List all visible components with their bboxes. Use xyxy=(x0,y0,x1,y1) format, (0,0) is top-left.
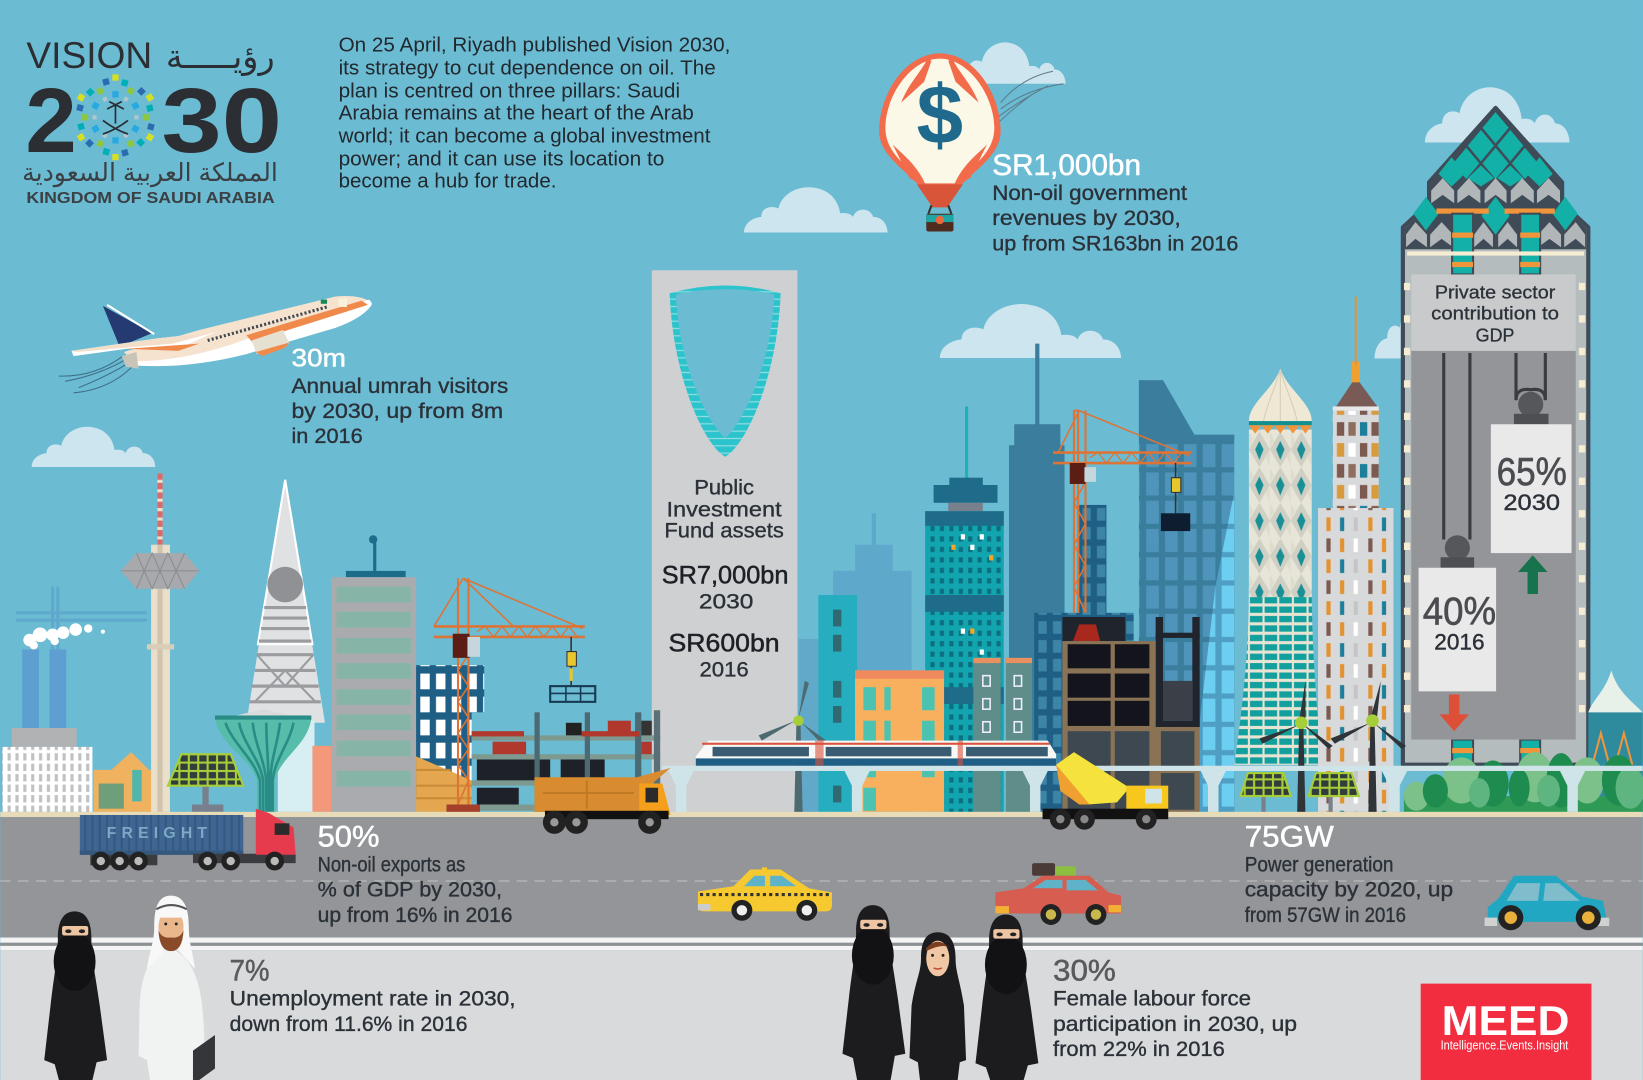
lift pulley right xyxy=(1516,389,1545,400)
woman 1 xyxy=(842,905,905,1080)
blue windows building xyxy=(416,665,484,796)
lower panel xyxy=(0,950,1643,1080)
stat: 7% unemployment xyxy=(230,954,516,1036)
stat: 30% female labour force: participation in 2030, up xyxy=(1053,1012,1297,1036)
truck chassis xyxy=(90,855,157,865)
public investment fund tower: Fund assets xyxy=(664,518,784,542)
stat: 30m umrah visitors: in 2016 xyxy=(291,424,363,448)
private sector GDP text: 40% xyxy=(1423,590,1496,633)
private sector GDP text: contribution to xyxy=(1431,302,1559,323)
trees xyxy=(1404,752,1643,812)
balloon basket xyxy=(926,214,953,232)
arrow up green xyxy=(1518,555,1547,594)
smoke xyxy=(23,623,105,649)
private sector GDP text xyxy=(1423,282,1567,654)
stat: 30m umrah visitors xyxy=(291,345,508,448)
dump truck xyxy=(534,768,671,834)
construction overlap on tower edge xyxy=(652,735,660,786)
person: man in thobe with briefcase xyxy=(139,896,215,1080)
intro text block: world; it can become a global investment xyxy=(338,125,711,147)
public investment fund tower: 2016 xyxy=(699,658,749,682)
person: woman in niqab left xyxy=(44,911,107,1080)
clouds xyxy=(32,42,1569,467)
plane engine xyxy=(252,330,289,354)
gherkin onion dome xyxy=(1249,369,1312,421)
fund text: Public xyxy=(694,475,754,499)
grey office tower xyxy=(373,539,376,571)
brown frame block xyxy=(1062,641,1156,812)
crane right xyxy=(1053,411,1191,613)
stat: 30% female labour force xyxy=(1053,954,1297,1061)
logo digit 2: 2 xyxy=(25,69,77,172)
roof orange beams xyxy=(1436,208,1489,214)
construction site left xyxy=(472,712,673,812)
cement mixer truck xyxy=(1043,752,1168,830)
intro text block: Arabia remains at the heart of the Arab xyxy=(339,102,694,124)
lift cables right xyxy=(1516,353,1545,400)
orange house xyxy=(93,752,157,812)
stat: SR1,000bn government revenues: SR1,000bn xyxy=(992,149,1141,182)
65% card xyxy=(1491,424,1572,553)
balloon wind lines xyxy=(995,71,1063,126)
lift pulley left xyxy=(1445,535,1470,560)
solar panel left xyxy=(202,786,209,813)
freight truck xyxy=(80,809,296,870)
public investment fund tower: SR600bn xyxy=(669,630,780,658)
tower roof outline xyxy=(1403,108,1588,765)
plane windows xyxy=(208,307,327,340)
stat: 50% non-oil exports: 50% xyxy=(318,820,379,853)
gherkin patterned body xyxy=(1249,429,1312,597)
logo wordmark VISION: VISION xyxy=(26,35,152,76)
private sector GDP text: GDP xyxy=(1476,324,1514,345)
gherkin tower xyxy=(1234,369,1322,765)
balloon envelope xyxy=(879,53,1001,189)
intro text block xyxy=(338,34,730,193)
dollar sign: $ xyxy=(917,68,963,162)
smokestacks xyxy=(22,649,39,729)
low glass block xyxy=(278,721,314,812)
intro text block: its strategy to cut dependence on oil. The xyxy=(339,57,716,79)
stat: 30% female labour force: 30% xyxy=(1053,954,1116,987)
logo arabic kingdom name: المملكة العربية السعودية xyxy=(22,159,278,188)
MEED logo box: Intelligence.Events.Insight xyxy=(1441,1039,1569,1053)
public investment fund tower: Investment xyxy=(666,497,782,521)
intro text block: plan is centred on three pillars: Saudi xyxy=(339,80,680,102)
icon: airplane xyxy=(59,296,372,393)
stat: SR1,000bn government revenues: up from SR163bn in 2016 xyxy=(992,231,1238,255)
blue car xyxy=(1485,876,1609,930)
public investment fund tower: SR7,000bn xyxy=(662,561,789,589)
logo: Vision 2030 Kingdom of Saudi Arabia xyxy=(22,35,282,207)
stat: 7% unemployment: 7% xyxy=(230,954,269,987)
private sector GDP text: Private sector xyxy=(1435,282,1555,303)
emblem palm and swords xyxy=(103,102,128,134)
stat: 7% unemployment: Unemployment rate in 2030, xyxy=(230,987,516,1011)
plane wing xyxy=(71,332,215,356)
TV tower xyxy=(157,473,163,547)
public investment fund tower xyxy=(652,270,797,813)
wind turbines right xyxy=(1259,681,1406,815)
grey-green narrow buildings xyxy=(973,658,1032,812)
stat: 50% non-oil exports: up from 16% in 2016 xyxy=(318,903,512,927)
MEED logo box: MEED xyxy=(1442,997,1569,1044)
plane exhaust lines xyxy=(59,356,134,393)
truck cab xyxy=(256,809,296,855)
far skyline xyxy=(798,344,1234,812)
intro text block: power; and it can use its location to xyxy=(339,149,664,171)
red car with luggage xyxy=(995,863,1121,925)
private sector GDP text: 2030 xyxy=(1503,490,1560,515)
metro train xyxy=(696,741,1056,766)
gherkin flared base xyxy=(1234,587,1322,765)
small mosque right edge xyxy=(1588,670,1643,812)
left cityscape xyxy=(2,473,673,817)
roof grey arrowheads upper xyxy=(1406,178,1585,247)
turquoise tower xyxy=(925,406,1004,812)
plane body xyxy=(124,296,371,365)
stat: 30m umrah visitors: by 2030, up from 8m xyxy=(291,399,503,423)
tower heading panel xyxy=(1411,274,1576,351)
crane mast xyxy=(1074,411,1085,613)
woman 2 with visible face xyxy=(909,932,966,1080)
tower pillars xyxy=(1452,214,1540,767)
tower lift shaft xyxy=(1411,351,1576,740)
stat: SR1,000bn government revenues xyxy=(992,149,1238,255)
private sector GDP text: 2016 xyxy=(1434,629,1485,654)
blue glass tower xyxy=(1139,380,1234,812)
truck freight label: FREIGHT xyxy=(107,825,212,842)
intro text block: On 25 April, Riyadh published Vision 2030, xyxy=(339,34,730,56)
teal building left of tower xyxy=(818,595,857,812)
stat: 75GW power generation: from 57GW in 2016 xyxy=(1245,903,1406,927)
intro text block: become a hub for trade. xyxy=(339,171,556,193)
logo kingdom of saudi arabia: KINGDOM OF SAUDI ARABIA xyxy=(26,190,275,207)
lift cables left xyxy=(1444,353,1470,539)
logo digits 30: 30 xyxy=(162,69,282,172)
MEED logo box xyxy=(1421,984,1591,1080)
arrow down red xyxy=(1440,695,1469,731)
solar panels right xyxy=(1241,773,1359,813)
truck container xyxy=(80,815,243,855)
public investment fund tower: 2030 xyxy=(699,590,753,614)
crane cab and hook xyxy=(1070,463,1085,484)
big private sector tower xyxy=(1403,108,1588,767)
stat: 30m umrah visitors: Annual umrah visitors xyxy=(291,374,508,398)
stat: 75GW power generation: Power generation xyxy=(1245,853,1393,877)
private sector GDP text: 65% xyxy=(1497,451,1567,494)
icon: hot air balloon with dollar sign xyxy=(879,53,1063,232)
stat: 7% unemployment: down from 11.6% in 2016 xyxy=(230,1012,467,1036)
Al Faisaliah tower xyxy=(246,480,325,723)
elevated rail and piers xyxy=(662,766,1643,812)
truck wheels xyxy=(91,852,284,870)
plane tail xyxy=(103,306,152,347)
upper posts and bricks xyxy=(1062,617,1200,727)
faint crane xyxy=(16,587,147,655)
roof teal diamonds xyxy=(1413,112,1578,235)
balloon skirt xyxy=(917,184,963,207)
taxi xyxy=(698,867,832,921)
stat: 75GW power generation: 75GW xyxy=(1245,820,1334,853)
stat: 30% female labour force: Female labour force xyxy=(1053,987,1251,1011)
stat: 50% non-oil exports xyxy=(318,820,512,927)
crane left xyxy=(434,578,595,817)
road xyxy=(0,812,1643,950)
woman 3 xyxy=(975,914,1038,1080)
40% card xyxy=(1419,568,1496,691)
stat: 30% female labour force: from 22% in 2016 xyxy=(1053,1037,1225,1061)
stat: 50% non-oil exports: % of GDP by 2030, xyxy=(318,878,502,902)
crane jib xyxy=(1053,453,1191,463)
dark blue building behind construction xyxy=(1034,613,1134,812)
white low building xyxy=(12,728,77,747)
tower side windows xyxy=(1407,283,1582,733)
orange apartment building xyxy=(855,670,944,812)
group: three women xyxy=(842,905,1038,1080)
stat: 75GW power generation: capacity by 2020, up xyxy=(1245,878,1453,902)
logo arabic wordmark: رؤيـــــة xyxy=(166,39,275,77)
tower bowl opening xyxy=(670,285,781,457)
dark blue tower with spire xyxy=(1009,344,1065,812)
stat: SR1,000bn government revenues: revenues by 2030, xyxy=(992,206,1181,230)
stat: 50% non-oil exports: Non-oil exports as xyxy=(318,853,465,877)
crane load xyxy=(1161,513,1190,531)
water tower xyxy=(215,719,311,812)
small dark tower behind crane xyxy=(1079,505,1106,620)
cream tall tower xyxy=(1318,296,1393,812)
stat: SR1,000bn government revenues: Non-oil government xyxy=(992,181,1187,205)
wind turbine centre xyxy=(759,681,828,813)
stat: 75GW power generation xyxy=(1245,820,1453,927)
sand pile xyxy=(416,756,472,812)
construction site right xyxy=(1062,617,1200,812)
stat: 30m umrah visitors: 30m xyxy=(291,345,346,373)
gherkin band xyxy=(1249,421,1312,425)
logo star emblem xyxy=(76,74,155,160)
